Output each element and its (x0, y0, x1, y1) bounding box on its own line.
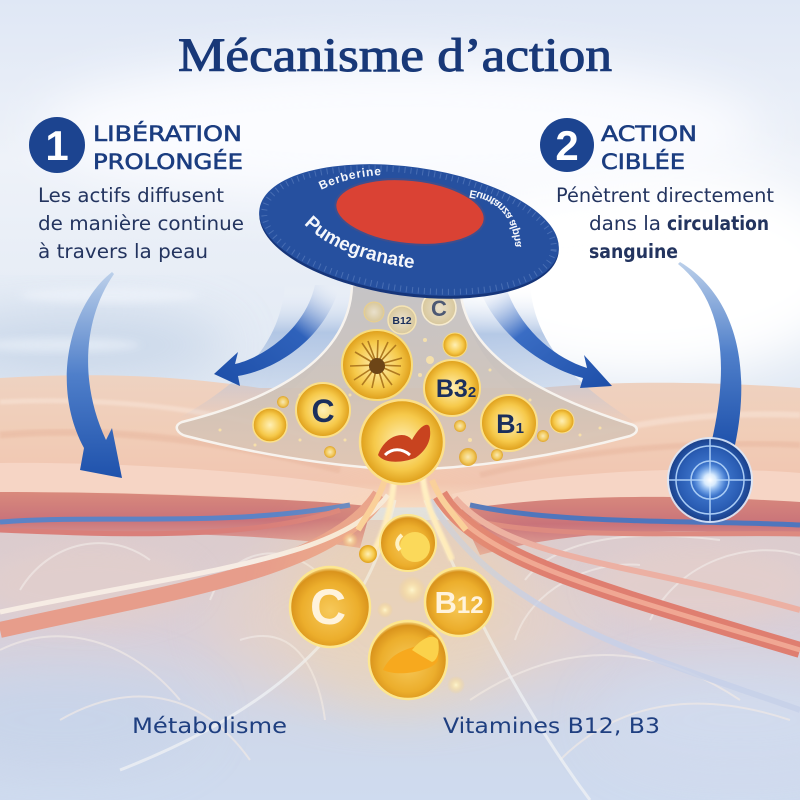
text block: step 2 description: sanguine (589, 240, 678, 263)
capsule: small right edge (550, 409, 574, 433)
heading: Libération prolongée: PROLONGÉE (93, 149, 243, 174)
heading: Action ciblée: CIBLÉE (601, 149, 685, 174)
capsule: B1: B1 (496, 409, 524, 439)
text block: step 2 description: Pénètrent directement (556, 184, 774, 207)
patch: label Pumegranate: Pumegranate (304, 215, 414, 268)
gel reservoir (177, 285, 637, 470)
capsule: C small (422, 291, 456, 325)
small droplet (359, 545, 377, 563)
capsule: C: C (311, 393, 335, 429)
badge 2 (540, 118, 594, 172)
text block: step 2 description: dans la (589, 212, 661, 235)
text block: step 1 description (38, 184, 244, 263)
heading: Action ciblée: ACTION (601, 122, 697, 146)
patch: label mirrored: Eumtanza alpha (469, 190, 522, 247)
sparks (342, 532, 465, 694)
label: Vitamines: Vitamines B12, B3 (443, 714, 660, 738)
capsule: pomegranate (360, 400, 444, 484)
arrow: prolonged diffusion (67, 272, 122, 478)
capsule: droplet (380, 515, 436, 571)
arrow: right release flow (478, 285, 612, 388)
capsule: C large (290, 567, 370, 647)
badge 1: 1 (45, 122, 69, 169)
patch: transdermal disc (259, 164, 559, 299)
capsule: B12 small: B12 (392, 315, 412, 327)
capsule: citrus (369, 621, 447, 699)
patch: red active core (332, 172, 488, 252)
capsule: C large: C (310, 579, 346, 635)
capsule: C (296, 383, 350, 437)
text block: step 2 description: circulation (667, 212, 769, 235)
text block: step 1 description: de manière continue (38, 212, 244, 235)
vitamin capsules in the reservoir (253, 291, 574, 484)
capsule: B3: B32 (436, 375, 476, 403)
cone halo: left and right (175, 285, 640, 425)
icon: blood target (667, 437, 753, 523)
step 2 (540, 118, 774, 263)
capsule: small top left (364, 302, 384, 322)
heading: Libération prolongée (93, 121, 243, 174)
text block: step 1 description: Les actifs diffusent (38, 184, 224, 207)
capsule: C small: C (431, 296, 447, 321)
label: Métabolisme: Métabolisme (132, 714, 287, 738)
step 1 (29, 117, 244, 263)
capsule: B12 large: B12 (434, 585, 484, 620)
heading: Libération prolongée: LIBÉRATION (93, 121, 242, 146)
badge 1 (29, 117, 85, 173)
lower tissue background (0, 520, 800, 800)
arrow: left release flow (214, 285, 340, 386)
text block: step 2 description (556, 184, 774, 263)
capsule: berberine fibres (342, 330, 412, 400)
capsule: small left (253, 408, 287, 442)
lower vitamin capsules (290, 515, 493, 699)
capsule: B12 small (388, 306, 416, 334)
capsule: B12 large (425, 568, 493, 636)
arrow: targeted action (678, 262, 741, 445)
badge 2: 2 (555, 122, 579, 169)
skin layer (0, 375, 800, 510)
patch: label Berberine: Berberine (318, 168, 381, 190)
small droplets (277, 396, 549, 466)
capsule: small right (443, 333, 467, 357)
dermis and blood vessels (0, 463, 800, 555)
glow behind lower vitamins (290, 490, 510, 710)
text block: step 1 description: à travers la peau (38, 240, 208, 263)
title: Mécanisme d’action (178, 29, 612, 82)
heading: Action ciblée (601, 122, 697, 174)
fan of vessels through the tissue (0, 470, 800, 800)
capsule: B3 (424, 360, 480, 416)
capsule: B1 (481, 395, 537, 451)
